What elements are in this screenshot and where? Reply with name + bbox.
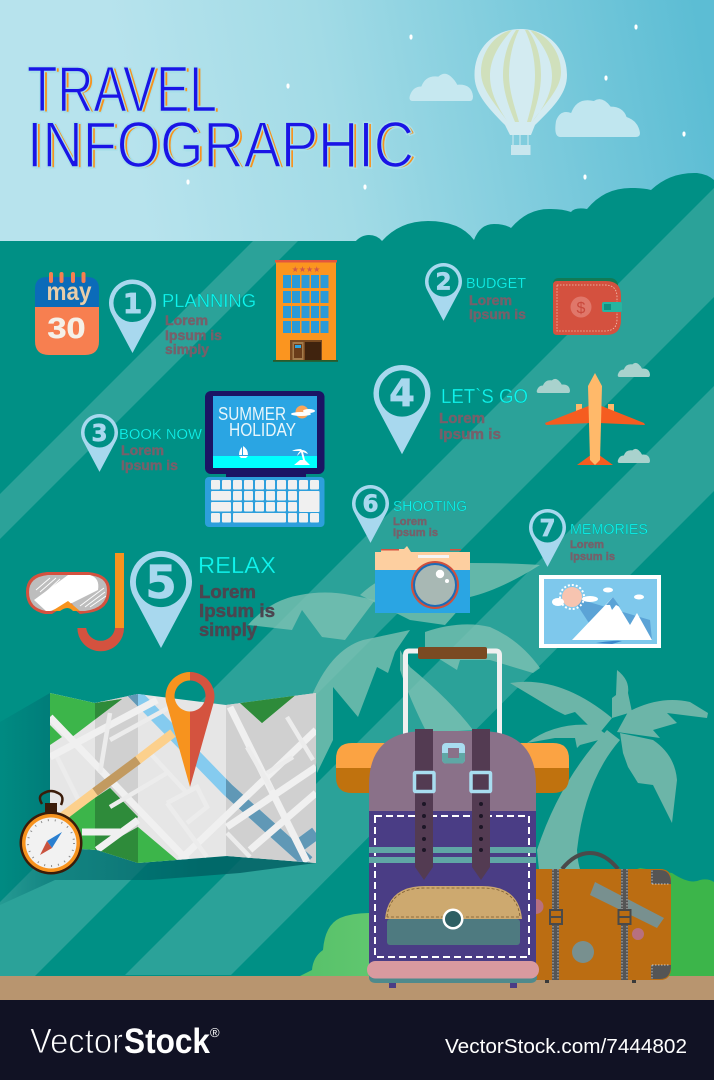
hot air balloon xyxy=(474,29,567,155)
pin 2 number: 2 xyxy=(435,270,452,296)
icon: wallet: $ xyxy=(577,300,586,317)
stars xyxy=(186,24,686,190)
icon: compass xyxy=(20,791,82,874)
pin 4 xyxy=(374,365,430,454)
map fold panels xyxy=(95,690,318,866)
icon: hotel: ★★★★ xyxy=(292,265,320,274)
darkened fold overlays xyxy=(95,694,316,863)
vectorstock logo: Stock xyxy=(124,1022,210,1061)
clouds near airplane xyxy=(537,363,650,463)
icon: airplane xyxy=(545,373,645,465)
planning label: Ipsum is xyxy=(165,328,222,343)
title: INFOGRAPHIC xyxy=(27,108,414,181)
base xyxy=(369,976,537,983)
shooting label: Ipsum is xyxy=(393,527,438,539)
budget label xyxy=(466,275,526,322)
bedroll xyxy=(336,743,569,768)
icon: framed photo xyxy=(539,575,661,648)
icon: calendar: 30 xyxy=(48,313,86,345)
pin 5 xyxy=(130,551,192,648)
vectorstock logo: Vector xyxy=(30,1022,123,1061)
footer band xyxy=(0,1000,714,1080)
icon: laptop xyxy=(205,391,324,527)
footer url: VectorStock.com/7444802 xyxy=(445,1036,687,1058)
map location pin xyxy=(165,672,215,787)
book now label: BOOK NOW xyxy=(119,426,203,443)
map xyxy=(50,689,318,866)
sky background xyxy=(0,0,714,242)
map paper xyxy=(50,690,318,866)
title xyxy=(27,52,417,182)
green areas xyxy=(50,693,298,866)
vectorstock logo: ® xyxy=(210,1025,220,1040)
icon: snorkel mask xyxy=(26,553,124,651)
let's go label xyxy=(439,386,528,443)
relax label: Ipsum is xyxy=(199,601,275,621)
buckles xyxy=(414,772,490,792)
planning label: PLANNING xyxy=(162,291,256,311)
title: TRAVEL xyxy=(30,54,220,126)
trolley handle xyxy=(406,651,500,735)
suitcase xyxy=(536,853,671,983)
pin 1 number: 1 xyxy=(123,287,142,320)
palm tree small xyxy=(510,670,708,880)
icon: calendar: may xyxy=(46,278,92,306)
suitcase straps xyxy=(552,869,671,980)
pin 3 number: 3 xyxy=(91,421,108,447)
straps xyxy=(415,729,433,880)
shooting label: SHOOTING xyxy=(393,498,467,515)
budget label: BUDGET xyxy=(466,275,526,292)
book now label xyxy=(119,426,203,473)
title: TRAVEL xyxy=(27,52,217,126)
icon: wallet xyxy=(553,278,622,335)
relax label: simply xyxy=(199,620,257,640)
pin 6 xyxy=(352,485,389,543)
icon: camera xyxy=(375,546,470,613)
icon: hotel xyxy=(273,260,338,362)
backpack body xyxy=(369,811,536,963)
shooting label xyxy=(393,498,467,539)
cloud right xyxy=(555,99,640,137)
planning label xyxy=(162,291,256,357)
memories label: Lorem xyxy=(570,539,604,551)
backpack top xyxy=(369,731,536,811)
palm tree large xyxy=(248,562,540,773)
planning label: Lorem xyxy=(165,313,208,328)
pin 6 number: 6 xyxy=(362,492,379,518)
let's go label: LET`S GO xyxy=(441,386,528,408)
bush left xyxy=(300,913,369,976)
backpack xyxy=(336,647,569,988)
hills xyxy=(355,173,714,242)
diagonal light stripes xyxy=(0,188,714,1011)
memories label: MEMORIES xyxy=(570,521,648,538)
route xyxy=(138,733,173,760)
title: INFOGRAPHIC xyxy=(30,109,417,182)
icon: laptop: HOLIDAY xyxy=(229,420,296,440)
shooting label: Lorem xyxy=(393,516,427,528)
front pocket xyxy=(387,919,520,945)
pin 7 number: 7 xyxy=(539,516,556,542)
bush right xyxy=(536,868,714,976)
let's go label: Lorem xyxy=(439,410,485,427)
pin 3 xyxy=(81,414,118,472)
let's go label: Ipsum is xyxy=(439,426,501,443)
suitcase buckles xyxy=(550,910,630,924)
river xyxy=(130,689,316,862)
pin 4 number: 4 xyxy=(389,372,415,415)
memories label xyxy=(570,521,648,563)
icon: laptop: SUMMER xyxy=(218,404,286,424)
pin 7 xyxy=(529,509,566,567)
relax label: RELAX xyxy=(198,552,276,578)
ground xyxy=(0,976,714,1000)
pin 1 xyxy=(109,279,156,353)
budget label: Ipsum is xyxy=(469,307,526,322)
vectorstock logo xyxy=(30,1022,220,1061)
pin 5 number: 5 xyxy=(145,556,177,609)
relax label xyxy=(198,552,276,640)
roads xyxy=(50,700,316,862)
relax label: Lorem xyxy=(199,582,256,602)
teal background xyxy=(0,241,714,981)
book now label: Ipsum is xyxy=(121,458,178,473)
map shadow xyxy=(0,693,316,905)
budget label: Lorem xyxy=(469,293,512,308)
book now label: Lorem xyxy=(121,443,164,458)
memories label: Ipsum is xyxy=(570,551,615,563)
cloud left xyxy=(409,74,473,101)
pin 2 xyxy=(425,263,462,321)
planning label: simply xyxy=(165,342,209,357)
icon: calendar xyxy=(35,272,99,355)
